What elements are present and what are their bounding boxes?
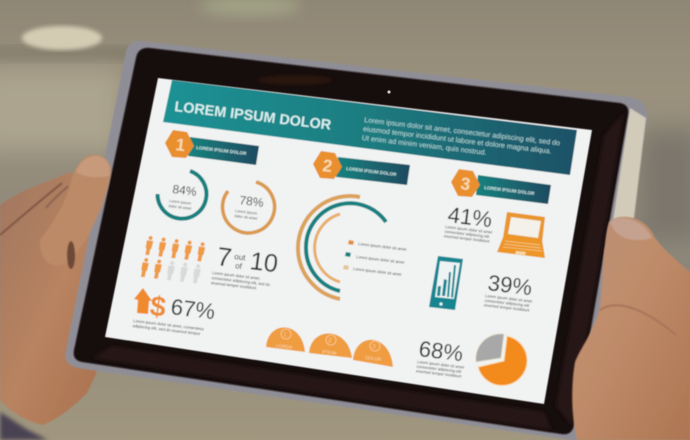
section 2 badge: 2 bbox=[321, 155, 334, 176]
68% stat: eiusmod tempor incididunt bbox=[416, 368, 463, 379]
7 out of 10 stat: consectetur adipiscing elit, sed do bbox=[211, 275, 271, 287]
finger crease bbox=[0, 183, 62, 235]
person 4 bbox=[183, 240, 193, 260]
outer arc bbox=[298, 196, 360, 299]
legend item 3: Lorem ipsum dolor sit amet bbox=[353, 266, 402, 277]
dome 2 bbox=[309, 333, 352, 358]
dome 1: 1 bbox=[283, 332, 287, 338]
person 9 bbox=[179, 262, 189, 282]
bezel right reflection bbox=[556, 112, 624, 426]
header description: Ut enim ad minim veniam, quis nostrud. bbox=[361, 134, 487, 157]
middle arc bbox=[306, 203, 386, 291]
68% stat: 68% bbox=[417, 336, 465, 366]
person 10 bbox=[192, 264, 202, 284]
7 out of 10 stat: eiusmod tempor incididunt bbox=[211, 280, 258, 291]
icon: arrow and dollar bbox=[134, 288, 168, 323]
person 5 bbox=[196, 242, 206, 262]
68% stat: consectetur adipiscing elit bbox=[416, 364, 462, 374]
67% stat bbox=[132, 294, 217, 337]
67% stat: 67% bbox=[169, 294, 217, 324]
header description: eiusmod tempor incididunt ut labore et dolore magna aliqua. bbox=[363, 125, 552, 156]
web shadow bbox=[67, 241, 75, 269]
ring gauge 84% bbox=[157, 171, 206, 219]
39% stat: consectetur adipiscing elit bbox=[484, 298, 530, 308]
concentric arc chart bbox=[298, 196, 386, 299]
67% stat: adipiscing elit, sed do eiusmod tempor bbox=[132, 323, 201, 336]
41% stat: Lorem ipsum dolor sit amet bbox=[445, 224, 493, 235]
left palm bbox=[0, 172, 110, 425]
person 6 bbox=[140, 258, 150, 277]
39% stat: Lorem ipsum dolor sit amet bbox=[485, 293, 533, 304]
knuckle crease bbox=[600, 305, 676, 335]
ring gauge 84%: Lorem ipsum bbox=[169, 199, 191, 206]
screen background bbox=[105, 78, 592, 404]
section 2 badge: LOREM IPSUM DOLOR bbox=[346, 166, 397, 177]
left sleeve bbox=[0, 412, 48, 440]
thumb tip bbox=[76, 156, 110, 177]
section 1 badge bbox=[165, 130, 259, 165]
person 3 bbox=[170, 239, 180, 259]
person 7 bbox=[153, 259, 163, 279]
tablet black bezel bbox=[74, 48, 628, 434]
dome tabs bbox=[266, 327, 393, 367]
ring gauge 78% bbox=[223, 182, 275, 233]
section 3 badge: 3 bbox=[459, 173, 472, 194]
camera bbox=[387, 90, 391, 94]
icon: arrow and dollar: $ bbox=[148, 289, 168, 323]
bezel bottom reflection bbox=[92, 346, 552, 430]
dome 2: IPSUM bbox=[322, 349, 337, 356]
dome 3: DOLOR bbox=[365, 355, 382, 362]
41% stat: consectetur adipiscing elit bbox=[444, 229, 490, 239]
people pictogram bbox=[140, 236, 206, 284]
39% stat bbox=[484, 270, 534, 313]
phone bar 1 bbox=[437, 286, 441, 296]
39% stat: eiusmod tempor incididunt bbox=[484, 302, 531, 313]
thumb crease bbox=[46, 186, 68, 208]
arc chart legend bbox=[343, 240, 407, 277]
legend item 1: Lorem ipsum dolor sit amet bbox=[358, 241, 407, 252]
header description bbox=[361, 116, 561, 165]
dome 1 bbox=[266, 327, 305, 352]
68% stat bbox=[416, 336, 465, 379]
icon: laptop bbox=[497, 212, 545, 258]
left thumb and fingers bbox=[0, 155, 111, 269]
header description: Lorem ipsum dolor sit amet, consectetur adipiscing elit, sed do bbox=[364, 116, 561, 147]
39% stat: 39% bbox=[486, 270, 534, 300]
dome 1: LOREM bbox=[276, 343, 293, 350]
section 1 badge: 1 bbox=[174, 134, 187, 155]
bezel top reflection bbox=[257, 75, 333, 85]
tablet silver frame bbox=[65, 41, 647, 440]
7 out of 10 stat: 7 bbox=[215, 241, 234, 273]
ring gauge 84%: dolor sit amet bbox=[168, 204, 192, 211]
title: LOREM IPSUM DOLOR bbox=[173, 99, 333, 134]
pie chart bbox=[476, 334, 527, 386]
screen infographic bbox=[105, 78, 592, 404]
header banner bbox=[163, 80, 577, 175]
icon: smartphone bbox=[429, 256, 463, 310]
section 3 badge: LOREM IPSUM DOLOR bbox=[484, 185, 535, 196]
phone bar 4 bbox=[451, 265, 456, 298]
dome 3: 3 bbox=[372, 344, 376, 350]
section 3 badge bbox=[451, 169, 551, 204]
ring gauge 78%: 78% bbox=[239, 193, 265, 210]
person 1 bbox=[144, 236, 154, 255]
phone bar 3 bbox=[447, 272, 451, 297]
7 out of 10 stat: Lorem ipsum dolor sit amet, bbox=[212, 270, 261, 281]
pie gray slice bbox=[476, 334, 504, 362]
right hand bbox=[572, 217, 690, 440]
person 2 bbox=[157, 237, 167, 257]
7 out of 10 stat: out bbox=[234, 252, 247, 262]
41% stat: 41% bbox=[446, 202, 494, 232]
7 out of 10 stat: of bbox=[235, 261, 243, 271]
phone bar 2 bbox=[442, 279, 447, 296]
ring gauge 84%: 84% bbox=[172, 182, 198, 199]
7 out of 10 stat: 10 bbox=[248, 247, 280, 278]
pie orange slice bbox=[478, 336, 527, 386]
person 8 bbox=[166, 261, 176, 281]
41% stat bbox=[444, 202, 494, 244]
tablet bbox=[65, 41, 647, 440]
7 out of 10 stat bbox=[211, 241, 280, 292]
section 1 badge: LOREM IPSUM DOLOR bbox=[196, 145, 247, 156]
ring gauge 78%: dolor sit amet bbox=[234, 214, 258, 221]
dome 2: 2 bbox=[328, 338, 332, 344]
right thumbnail bbox=[610, 218, 652, 240]
legend item 2: Lorem ipsum dolor sit amet bbox=[356, 254, 405, 265]
ring gauge 78%: Lorem ipsum bbox=[235, 209, 257, 216]
41% stat: eiusmod tempor incididunt bbox=[444, 233, 491, 244]
section 2 badge bbox=[313, 151, 410, 185]
frame right cream edge bbox=[610, 108, 646, 240]
67% stat: Lorem ipsum dolor sit amet, consectetur bbox=[133, 318, 205, 332]
dome 3 bbox=[353, 340, 393, 367]
68% stat: Lorem ipsum dolor sit amet bbox=[417, 359, 465, 370]
inner arc bbox=[315, 214, 340, 282]
